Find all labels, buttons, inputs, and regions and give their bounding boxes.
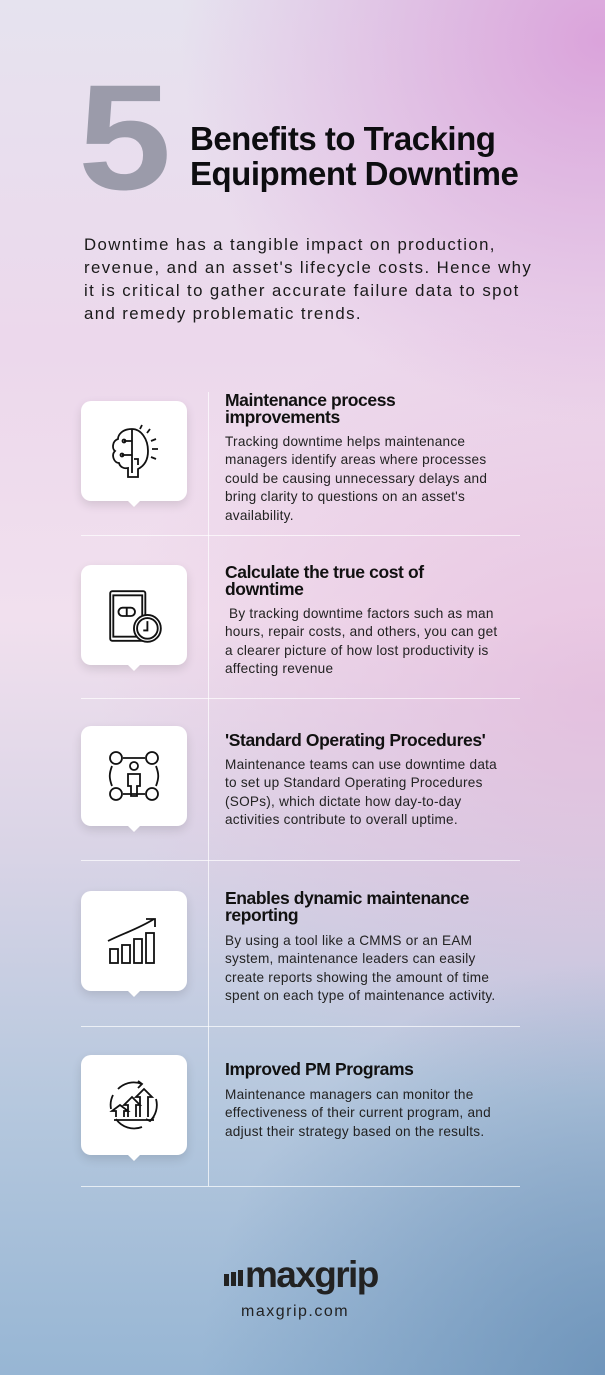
title: Equipment Downtime <box>190 155 518 192</box>
section 3 text <box>225 757 497 827</box>
section 1 text: bring clarity to questions on an asset's <box>225 489 465 504</box>
section 4 text <box>225 933 495 1003</box>
section 1 heading <box>225 390 395 427</box>
website: maxgrip.com <box>241 1303 349 1320</box>
big number 5: 5 <box>78 53 171 221</box>
section 5 text <box>225 1087 491 1139</box>
card icon: brain bulb <box>81 401 187 501</box>
section 2 text: affecting revenue <box>225 661 333 676</box>
section 2 heading: Calculate the true cost of <box>225 562 424 582</box>
section 4 heading <box>225 888 469 925</box>
section 1 text: availability. <box>225 508 294 523</box>
section 2 text: By tracking downtime factors such as man <box>229 606 494 621</box>
section 1 heading: Maintenance process <box>225 390 395 410</box>
section 3 text: activities contribute to overall uptime. <box>225 812 458 827</box>
intro text <box>84 235 532 323</box>
section 5 text: adjust their strategy based on the results. <box>225 1124 484 1139</box>
section 1 text <box>225 434 487 523</box>
section 3 text: to set up Standard Operating Procedures <box>225 775 483 790</box>
section 1 text: could be causing unnecessary delays and <box>225 471 487 486</box>
section 4 heading: Enables dynamic maintenance <box>225 888 469 908</box>
section 3 heading: 'Standard Operating Procedures' <box>225 730 485 750</box>
section 1 text: managers identify areas where processes <box>225 452 486 467</box>
section 2 text: hours, repair costs, and others, you can get <box>225 624 497 639</box>
intro text: revenue, and an asset's lifecycle costs. Hence why <box>84 258 532 277</box>
card icon: circular arrows <box>81 1055 187 1155</box>
intro text: it is critical to gather accurate failure data to spot <box>84 281 520 300</box>
logo: maxgrip <box>245 1254 378 1295</box>
section 5 heading: Improved PM Programs <box>225 1059 413 1079</box>
intro text: Downtime has a tangible impact on production, <box>84 235 496 254</box>
section 3 text: (SOPs), which dictate how day-to-day <box>225 794 461 809</box>
section 5 text: effectiveness of their current program, and <box>225 1105 491 1120</box>
card icon: people network <box>81 726 187 826</box>
section 2 text <box>225 606 498 676</box>
section 1 text: Tracking downtime helps maintenance <box>225 434 465 449</box>
section 5 text: Maintenance managers can monitor the <box>225 1087 474 1102</box>
section 4 text: create reports showing the amount of time <box>225 970 489 985</box>
section 4 text: system, maintenance leaders can easily <box>225 951 476 966</box>
title: Benefits to Tracking <box>190 120 495 157</box>
section 2 text: a clearer picture of how lost productivity is <box>225 643 489 658</box>
section 4 heading: reporting <box>225 905 298 925</box>
section 1 heading: improvements <box>225 407 340 427</box>
title <box>190 120 518 192</box>
section 2 heading <box>225 562 424 599</box>
section 4 text: By using a tool like a CMMS or an EAM <box>225 933 472 948</box>
intro text: and remedy problematic trends. <box>84 304 362 323</box>
section 3 text: Maintenance teams can use downtime data <box>225 757 497 772</box>
section 2 heading: downtime <box>225 579 303 599</box>
section 4 text: spent on each type of maintenance activity. <box>225 988 495 1003</box>
card icon: phone clock <box>81 565 187 665</box>
card icon: bar chart growth <box>81 891 187 991</box>
